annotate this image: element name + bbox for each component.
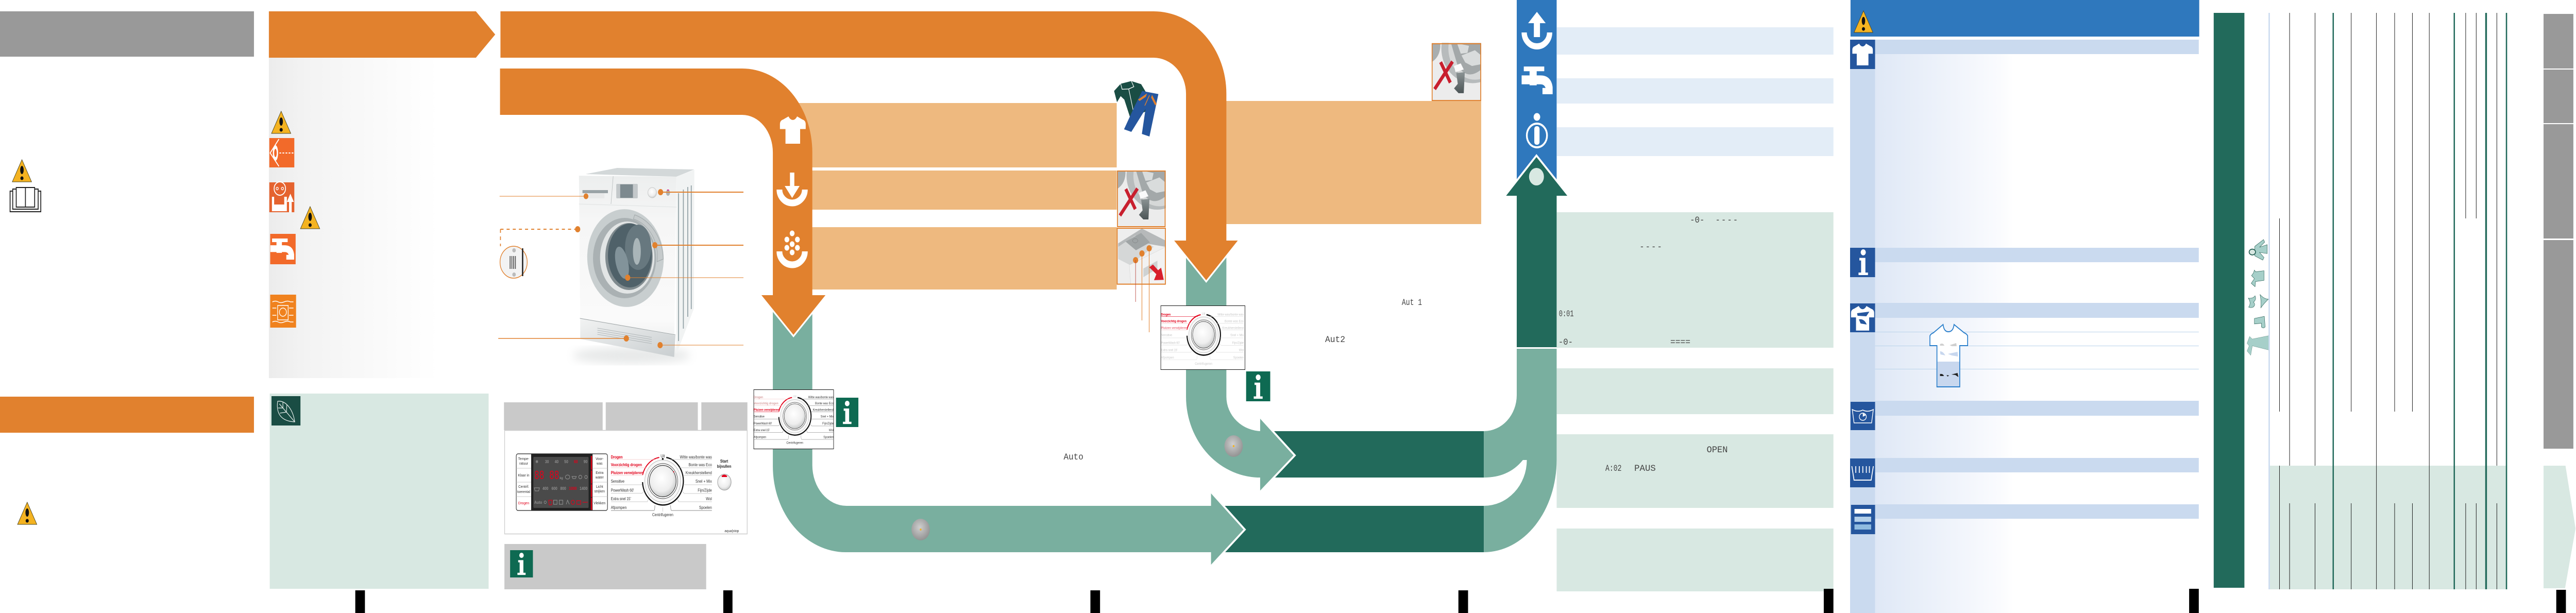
arrow: second orange flow with icons — [500, 69, 825, 335]
knob marker two — [1225, 435, 1243, 457]
table: left blue edge — [2268, 13, 2270, 589]
arrow: upper green flow short — [1186, 258, 1484, 492]
program dial thumbnail two: Witte was/bonte was — [1217, 313, 1244, 317]
panel: pale green table footer — [2270, 466, 2507, 589]
display readout: Aut 1: Aut 1 — [1402, 298, 1422, 308]
program dial thumbnail one: Sensitive — [754, 415, 765, 419]
stain table lines — [1875, 332, 2199, 369]
control panel: program dial: Pluizen verwijderen — [611, 470, 643, 475]
control panel: display and buttons: Tempe- — [518, 457, 530, 461]
program dial thumbnail two: Centrifugeren — [1195, 362, 1213, 366]
program dial thumbnail one: Afpompen — [754, 436, 766, 439]
icon: info — [510, 550, 533, 577]
arrow: green merge curve — [1484, 349, 1556, 552]
photo: do not trap laundry — [1117, 142, 1188, 227]
program dial thumbnail one: PowerWash 60' — [754, 422, 772, 425]
control panel: display and buttons: strijken — [595, 490, 605, 493]
callouts on washer — [498, 189, 743, 348]
icon: mains plug — [269, 182, 294, 212]
program dial thumbnail two: Snel + Mix — [1230, 333, 1244, 337]
icon: unload — [1524, 12, 1550, 46]
control panel: aquastop mark: aqua|stop — [724, 530, 739, 533]
arrow: orange header tab — [269, 11, 495, 58]
panel: green row three: A:02 — [1605, 464, 1621, 474]
program dial thumbnail one: Voorzichtig drogen — [754, 402, 778, 405]
control panel: display and buttons: 30 — [545, 459, 549, 464]
display readout: Auto: Auto — [1064, 452, 1083, 463]
icon: leaf — [272, 396, 300, 425]
panel: installation steps gradient — [269, 58, 438, 378]
icon: drum loading — [779, 172, 805, 203]
arrow: lower green flow long — [773, 304, 1484, 566]
program dial thumbnail one: Centrifugeren — [786, 441, 803, 445]
icon: ventilation — [270, 295, 296, 328]
row bars — [1875, 40, 2199, 519]
program dial thumbnail two: Voorzichtig drogen — [1161, 319, 1187, 323]
illustration: shirt with stains — [1930, 325, 1968, 387]
control panel: display and buttons: Klaar in — [518, 474, 530, 478]
control panel: program dial — [611, 453, 712, 517]
program dial thumbnail two — [1161, 306, 1245, 370]
control panel: program dial: Snel + Mix — [696, 479, 712, 484]
panel: light orange step loading two — [794, 171, 1117, 210]
program dial thumbnail two: Extra snel 15' — [1161, 348, 1178, 352]
icon: eye inspection — [269, 138, 294, 167]
program dial thumbnail one: Fijn/Zijde — [822, 422, 834, 425]
program dial thumbnail two: Kreukherstellend — [1222, 326, 1244, 330]
arrow: top orange flow — [500, 11, 1238, 280]
icon: detergent — [779, 231, 805, 265]
program dial thumbnail two: Uit — [1202, 312, 1206, 316]
control panel: display and buttons: was — [596, 462, 603, 466]
control panel: display and buttons: Centrif. — [518, 485, 529, 489]
icon: shirt — [780, 116, 806, 144]
control panel: display and buttons: 400 — [543, 486, 548, 491]
program dial thumbnail one: Snel + Mix — [821, 415, 834, 419]
arrow: pale next page — [2544, 466, 2575, 588]
panel: green row main — [1556, 212, 1834, 348]
control panel: display and buttons: 600 — [551, 486, 557, 491]
control panel: display and buttons: Licht — [596, 485, 603, 489]
control panel: display and buttons: 88 88 — [534, 469, 559, 483]
panel: blue column with icons — [1517, 0, 1556, 180]
panel: control labels bars — [504, 402, 748, 430]
table: vertical rules upper — [2279, 13, 2497, 466]
panel: laundry gradient column — [1850, 40, 2013, 613]
control panel: program dial: Uit — [660, 453, 665, 458]
program dial thumbnail one: Pluizen verwijderen — [754, 408, 779, 412]
control panel: display and buttons: water — [595, 476, 604, 480]
control panel: display and buttons: ratuur — [519, 462, 529, 466]
program dial thumbnail two: Spoelen — [1233, 355, 1244, 360]
control panel: program dial: Witte was/bonte was — [680, 454, 712, 459]
control panel: display and buttons: Auto — [534, 500, 543, 505]
panel: green row three: OPEN — [1707, 445, 1727, 455]
icon: tub with spin marks — [1850, 458, 1875, 487]
icons: clothing types — [2247, 240, 2269, 355]
panel: environment tips — [270, 394, 488, 589]
icon: info circle — [1527, 113, 1547, 147]
panel: light blue row one — [1556, 27, 1834, 55]
panel: light orange step large — [1224, 101, 1481, 224]
panel: green row main: 0:01 — [1559, 309, 1574, 319]
panel: green row main: ---- — [1716, 215, 1738, 226]
panel: grey right tabs — [2544, 14, 2573, 449]
program dial thumbnail one: Spoelen — [823, 436, 834, 439]
control panel: display and buttons: 800 — [560, 486, 566, 491]
arrow: dark green up — [1505, 156, 1568, 347]
control panel: program dial: Voorzichtig drogen — [611, 462, 642, 467]
panel: light blue row three — [1556, 127, 1834, 156]
control panel: program dial: Spoelen — [699, 505, 712, 510]
control panel: program dial: Drogen — [611, 454, 623, 459]
control panel: program dial: Extra snel 15' — [611, 496, 631, 501]
control panel: display and buttons: kg — [560, 477, 563, 480]
washer illustration — [572, 168, 694, 364]
photo: do not trap laundry upper — [1432, 14, 1504, 101]
program dial thumbnail two: Drogen — [1161, 313, 1171, 317]
control panel: display and buttons: 90 — [584, 459, 587, 464]
program dial thumbnail one: Extra snel 15' — [754, 429, 770, 432]
control panel: display and buttons — [516, 454, 607, 510]
icon: warning triangle — [272, 111, 291, 133]
page marks — [355, 589, 2566, 613]
panel: green row main: ==== — [1670, 337, 1690, 348]
panel: dark green sidebar — [2214, 13, 2244, 588]
program dial thumbnail one: Drogen — [754, 396, 764, 399]
panel: green row main: -0- — [1558, 337, 1573, 348]
icon: work clothes — [1114, 81, 1158, 137]
control panel: display and buttons: 1400 — [580, 486, 587, 491]
program dial thumbnail two: Bonte was Eco — [1225, 319, 1244, 323]
control panel: program dial: Wol — [706, 496, 712, 501]
panel: safety header — [0, 11, 254, 57]
icon: wash basin with clock — [1851, 402, 1875, 430]
program dial thumbnail two: Afpompen — [1161, 355, 1174, 360]
control panel: program dial: Bonte was Eco — [688, 462, 712, 467]
icon: stained shirt — [1850, 303, 1875, 332]
program dial thumbnail one — [754, 389, 834, 449]
inset: detail circle — [500, 246, 527, 278]
icon: info — [1246, 371, 1270, 401]
icon: water tap — [270, 234, 296, 264]
control panel: display and buttons: 1000 — [569, 486, 577, 491]
panel: green row three — [1556, 434, 1834, 508]
panel: green row main: -0- — [1690, 215, 1704, 226]
program dial thumbnail two: Pluizen verwijderen — [1161, 326, 1188, 330]
control panel: program dial: Afpompen — [611, 505, 626, 510]
control panel: display and buttons: toerental — [517, 490, 530, 494]
control panel: display and buttons: 60 — [574, 459, 578, 464]
icon: read manual book — [10, 188, 41, 212]
panel: orange section header — [0, 397, 254, 433]
control panel: start button: Start — [720, 458, 728, 464]
panel: green row three: PAUS — [1634, 464, 1656, 474]
knob marker one — [911, 519, 930, 540]
program dial thumbnail one: Bonte was Eco — [815, 402, 834, 405]
program dial thumbnail one: Witte was/bonte was — [808, 396, 834, 399]
control panel: program dial: Centrifugeren — [652, 512, 673, 517]
control panel: start button: bijvullen — [717, 464, 732, 469]
icon: shirt — [1850, 40, 1875, 69]
program dial thumbnail two: Sensitive — [1161, 333, 1173, 337]
panel: control panel — [504, 431, 747, 534]
control panel: display and buttons: Vlekken — [594, 502, 605, 505]
icon: warning triangle — [300, 207, 320, 229]
control panel: display and buttons: Extra — [596, 471, 603, 475]
program dial thumbnail one: Wol — [829, 429, 834, 432]
icon: layers — [1851, 505, 1875, 534]
icon: information — [1850, 248, 1875, 277]
panel: blue header — [1851, 0, 2199, 37]
photo: detergent drawer — [1117, 228, 1166, 285]
drawer compartment markers — [1133, 245, 1152, 332]
display readout: Aut2: Aut2 — [1325, 335, 1345, 345]
control panel: program dial: Fijn/Zijde — [698, 488, 712, 493]
program dial thumbnail one: Uit — [793, 395, 796, 399]
icon: warning triangle — [18, 502, 37, 524]
panel: green row four — [1556, 529, 1834, 591]
control panel: display and buttons: Voor- — [596, 457, 604, 461]
icon: info — [836, 398, 858, 427]
panel: green row two — [1556, 368, 1834, 414]
program dial thumbnail two: Wol — [1239, 348, 1244, 352]
control panel: display and buttons: 40 — [555, 459, 558, 464]
control panel: display and buttons: Drogen — [518, 502, 529, 505]
program dial thumbnail two: Fijn/Zijde — [1232, 341, 1244, 345]
program dial thumbnail one: Kreukherstellend — [813, 408, 834, 412]
panel: light blue row two — [1556, 78, 1834, 104]
control panel: program dial: PowerWash 60' — [611, 488, 634, 493]
control panel: start button — [717, 458, 732, 490]
control panel: program dial: Sensitive — [611, 479, 624, 484]
panel: light orange step detergent — [794, 227, 1117, 290]
icon: tap — [1521, 66, 1553, 94]
panel: info note grey — [504, 544, 706, 589]
control panel: display and buttons: 50 — [564, 459, 568, 464]
panel: green row main: ---- — [1639, 242, 1662, 252]
program dial thumbnail two: PowerWash 60' — [1161, 341, 1180, 345]
control panel: program dial: Kreukherstellend — [686, 470, 712, 475]
table: green divider rules — [2332, 13, 2507, 589]
icon: warning triangle — [12, 160, 31, 182]
control panel: display and buttons: ❄ — [535, 459, 538, 464]
panel: light orange step loading — [794, 103, 1117, 167]
